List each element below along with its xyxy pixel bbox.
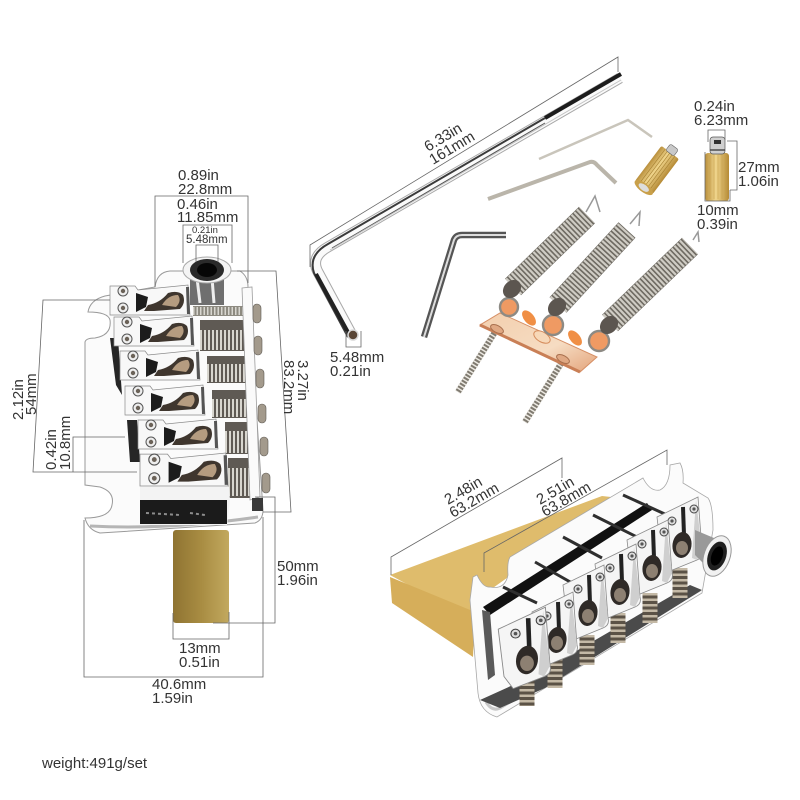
label: 6.23mm: 6.23mm bbox=[694, 112, 748, 129]
label: 0.51in: 0.51in bbox=[179, 654, 220, 671]
spring 1 bbox=[499, 196, 600, 302]
dark reflections bbox=[480, 585, 702, 708]
label: 3.27in: 3.27in bbox=[294, 360, 311, 401]
intonation springs bbox=[193, 306, 250, 498]
tilted brass insert bbox=[632, 140, 683, 198]
label: 1.96in: 1.96in bbox=[277, 572, 318, 589]
label: 0.24in: 0.24in bbox=[694, 98, 735, 115]
label: 6.33in: 6.33in bbox=[421, 120, 465, 155]
perspective dimension lines bbox=[391, 450, 667, 575]
left shadows bbox=[110, 338, 140, 462]
label: 10mm: 10mm bbox=[697, 202, 739, 219]
label: 13mm: 13mm bbox=[179, 640, 221, 657]
spring rings bbox=[500, 298, 609, 351]
brass sustain block bbox=[173, 530, 229, 623]
mounting post bbox=[183, 257, 231, 305]
medium hex key bbox=[488, 162, 616, 199]
label: 0.21in: 0.21in bbox=[192, 225, 218, 236]
copper claw bbox=[480, 313, 597, 372]
label: 50mm: 50mm bbox=[277, 558, 319, 575]
label: 2.51in: 2.51in bbox=[534, 473, 577, 508]
label: 54mm: 54mm bbox=[23, 373, 40, 415]
insert dimension lines bbox=[705, 130, 737, 201]
small hex key bbox=[539, 120, 652, 159]
label: arm 0.21in: 0.21in bbox=[330, 363, 371, 380]
tremolo arm bbox=[313, 74, 621, 340]
label: 10.8mm: 10.8mm bbox=[57, 416, 74, 470]
label: 1.59in: 1.59in bbox=[152, 690, 193, 707]
label: 0.89in: 0.89in bbox=[178, 167, 219, 184]
weight note: weight:491g/set bbox=[41, 755, 148, 772]
springs bbox=[527, 568, 680, 706]
perspective saddles bbox=[498, 497, 702, 689]
perspective bridge bbox=[390, 463, 736, 717]
spring 2 bbox=[544, 212, 640, 320]
label: 27mm: 27mm bbox=[738, 159, 780, 176]
string retainers bbox=[503, 495, 667, 603]
label: 2.12in: 2.12in bbox=[10, 379, 27, 420]
label: 161mm: 161mm bbox=[426, 128, 478, 168]
top view dimension lines bbox=[33, 196, 291, 677]
adjustment screw heads bbox=[253, 304, 270, 493]
perspective post bbox=[695, 530, 736, 580]
label: 5.48mm: 5.48mm bbox=[186, 234, 228, 246]
label: 2.48in: 2.48in bbox=[442, 473, 485, 508]
label: 63.2mm: 63.2mm bbox=[446, 480, 502, 521]
large hex key bbox=[424, 235, 506, 337]
label: 0.39in: 0.39in bbox=[697, 216, 738, 233]
label: 0.42in: 0.42in bbox=[43, 429, 60, 470]
label: 1.06in: 1.06in bbox=[738, 173, 779, 190]
upright brass insert bbox=[705, 137, 729, 201]
chrome plate bbox=[470, 463, 713, 717]
label: 0.46in: 0.46in bbox=[177, 196, 218, 213]
right bar bbox=[242, 287, 260, 500]
screws bbox=[458, 332, 562, 422]
label: 63.8mm: 63.8mm bbox=[538, 479, 594, 520]
front block bbox=[140, 487, 230, 525]
spring claw with springs and screws bbox=[458, 196, 699, 422]
label: 11.85mm: 11.85mm bbox=[177, 209, 238, 226]
spring 3 bbox=[596, 232, 699, 338]
arm dimension lines bbox=[310, 57, 618, 347]
label: 22.8mm: 22.8mm bbox=[178, 181, 232, 198]
base plate bbox=[85, 271, 263, 533]
label: arm 5.48mm: 5.48mm bbox=[330, 349, 384, 366]
label: 83.2mm: 83.2mm bbox=[280, 360, 297, 414]
brass block top bbox=[390, 496, 620, 620]
label: 40.6mm: 40.6mm bbox=[152, 676, 206, 693]
top view bridge bbox=[85, 257, 270, 623]
saddles bbox=[110, 285, 228, 486]
brass block side bbox=[390, 577, 475, 657]
